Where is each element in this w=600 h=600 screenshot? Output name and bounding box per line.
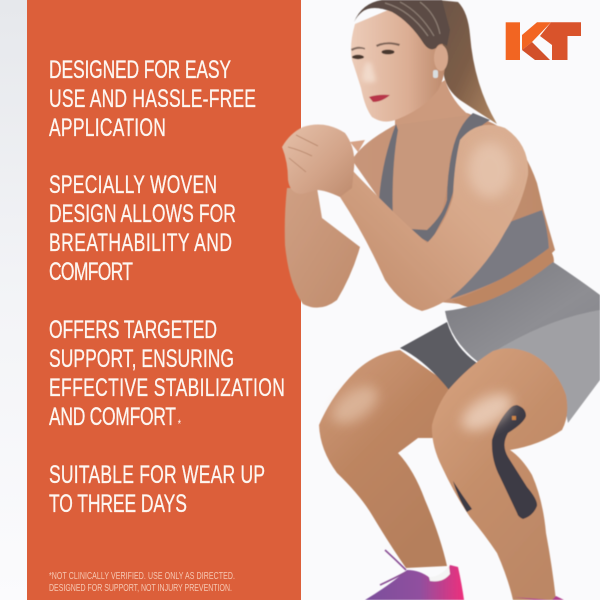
logo: KT [506,22,581,60]
text block: easy application [49,55,256,142]
text block: easy application: DESIGNED FOR EASY [49,55,231,84]
finger creases [288,135,318,172]
tape: side strip [453,481,472,512]
shoelaces [380,550,406,585]
text block: targeted support: AND COMFORT [49,402,176,431]
text block: targeted support: * [178,419,181,431]
soft highlight: far thigh [326,379,384,431]
logo K lower arm [522,42,550,60]
left light strip [0,0,27,600]
text block: breathability [49,170,236,286]
text block: easy application: APPLICATION [49,113,166,142]
hands clasped [282,125,354,197]
text block: breathability: DESIGN ALLOWS FOR [49,199,236,228]
footnote disclaimer: *NOT CLINICALLY VERIFIED. USE ONLY AS DIRECTED. [49,570,235,581]
text block: easy application: USE AND HASSLE-FREE [49,84,256,113]
eyes and brows [351,42,400,59]
chest skin [393,115,470,242]
text block: breathability: SPECIALLY WOVEN [49,170,217,199]
nose shade [362,62,376,82]
sock [429,566,450,581]
ponytail and hair back [438,0,497,124]
text block: breathability: BREATHABILITY AND [49,228,232,257]
midriff skin [452,248,554,308]
photo: woman squatting [282,0,600,600]
text block: breathability: COMFORT [49,257,133,286]
bra band [450,210,549,299]
tape: main strip [492,405,537,519]
bra right strap and neckline [393,113,490,243]
text block: wear time: SUITABLE FOR WEAR UP [49,460,265,489]
lips [369,95,390,102]
near arm [340,125,528,311]
text block: targeted support [49,315,285,431]
panel text: feature list [49,55,285,518]
ear and earring [433,45,448,78]
soft highlight: near thigh [456,386,518,438]
panel: orange features [27,0,301,600]
logo K stem [506,22,520,60]
hair strands [385,2,440,36]
soft highlight: shoulder [468,142,512,198]
shorts far leg [400,322,477,390]
text block: targeted support: EFFECTIVE STABILIZATION [49,373,285,402]
shorts waistband [445,262,600,362]
bra left strap [379,124,398,222]
text block: wear time: TO THREE DAYS [49,489,187,518]
neck [395,80,470,150]
footnote disclaimer [49,570,235,593]
text block: targeted support: SUPPORT, ENSURING [49,344,234,373]
far shoulder peek [350,140,365,152]
text block: wear time [49,460,265,518]
far arm [285,188,360,308]
hair front [354,0,450,49]
right shoe [513,596,564,600]
far leg [319,350,450,568]
logo K upper arm [522,22,551,50]
torso skin [352,113,555,305]
face [351,5,445,122]
near leg [432,348,567,600]
tape accent [512,416,516,420]
shorts near leg [478,310,600,423]
text block: targeted support: OFFERS TARGETED [49,315,217,344]
logo T [540,22,581,60]
footnote disclaimer: DESIGNED FOR SUPPORT, NOT INJURY PREVENTION. [49,582,232,593]
left shoe [365,565,464,600]
